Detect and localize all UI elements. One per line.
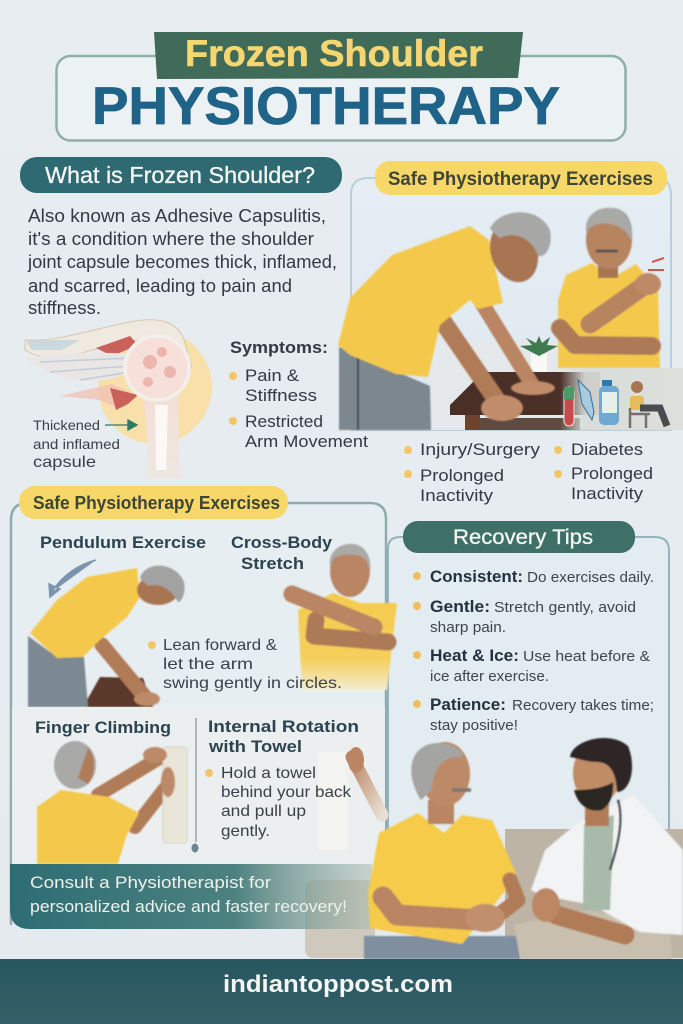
- tips list: stay positive!: [430, 717, 518, 734]
- definition text: it's a condition where the shoulder: [28, 229, 314, 249]
- definition text: joint capsule becomes thick, inflamed,: [27, 252, 337, 272]
- capsule label: and inflamed: [33, 436, 120, 452]
- pendulum instructions: let the arm: [163, 656, 253, 673]
- heading pill: what is frozen shoulder: [20, 157, 342, 193]
- tips list: Gentle:: [430, 597, 490, 616]
- symptoms list: Arm Movement: [245, 432, 368, 451]
- towel and arm: [318, 747, 382, 850]
- heading pill: recovery tips: Recovery Tips: [453, 526, 593, 549]
- internal rotation instructions: Hold a towel: [221, 765, 316, 782]
- footer: [0, 959, 683, 1024]
- callout: consult a physiotherapist: Consult a Physiotherapist for: [30, 873, 271, 892]
- arrow: capsule pointer: [105, 420, 137, 430]
- footer: indiantoppost.com: [223, 971, 453, 998]
- person: patient: [364, 742, 521, 959]
- panel: what is frozen shoulder: [20, 157, 342, 318]
- person: cross-body man: [558, 208, 661, 368]
- capsule label: capsule: [33, 454, 96, 471]
- heading pill: safe physiotherapy exercises lower: [19, 486, 288, 519]
- risk factors list: Inactivity: [571, 484, 644, 503]
- symptoms list: Stiffness: [245, 386, 317, 405]
- risk factors list: Inactivity: [420, 486, 494, 505]
- divider line: [192, 718, 198, 852]
- icon: test tube: [564, 387, 574, 426]
- person: doctor: [514, 738, 683, 959]
- definition text: Also known as Adhesive Capsulitis,: [28, 206, 326, 226]
- person: bending man: [338, 212, 555, 430]
- person: cross-body stretch: [292, 544, 397, 690]
- exercise heading: pendulum: Pendulum Exercise: [40, 533, 206, 552]
- panel: recovery tips: [388, 521, 669, 835]
- panel: safe physiotherapy exercises lower: [11, 486, 397, 925]
- person: finger climbing: [37, 741, 187, 864]
- tips list: Patience:: [430, 695, 506, 714]
- panel: exercises photo: [338, 161, 683, 430]
- definition text: and scarred, leading to pain and: [28, 276, 292, 296]
- heading pill: recovery tips: [403, 521, 635, 553]
- icon: seated person: [630, 381, 667, 428]
- tips list: [413, 567, 654, 734]
- icon: bottle: [599, 380, 619, 425]
- person: pendulum exercise: [28, 566, 185, 707]
- title banner: [154, 32, 523, 79]
- plant: [520, 336, 558, 372]
- internal rotation instructions: gently.: [221, 823, 270, 840]
- tips list: Heat & Ice:: [430, 646, 519, 665]
- exercise heading: cross-body stretch: [231, 533, 333, 573]
- risk factors list: [404, 440, 653, 505]
- table: [450, 372, 600, 430]
- arrow: pendulum swing: [49, 560, 96, 597]
- shoulder anatomy illustration: [25, 320, 212, 478]
- heading pill: safe physiotherapy exercises top: [375, 161, 667, 195]
- exercise heading: internal rotation: Internal Rotation: [208, 717, 359, 736]
- internal rotation instructions: and pull up: [221, 803, 306, 820]
- tips list: Stretch gently, avoid: [494, 599, 636, 616]
- causes icons strip: [560, 368, 683, 430]
- definition text: [27, 206, 337, 318]
- callout: consult a physiotherapist: personalized advice and faster recovery!: [30, 897, 347, 916]
- pendulum instructions: Lean forward &: [163, 637, 277, 654]
- lower exercises backdrop: [12, 707, 385, 864]
- tips list: sharp pain.: [430, 619, 506, 636]
- pendulum instructions: [148, 637, 342, 692]
- exercise heading: cross-body stretch: Stretch: [241, 554, 304, 573]
- heading pill: safe physiotherapy exercises top: Safe Physiotherapy Exercises: [388, 169, 653, 190]
- icons: pain arrows: [648, 258, 664, 270]
- symptoms list: Restricted: [245, 412, 323, 431]
- risk factors list: Injury/Surgery: [420, 440, 541, 459]
- capsule label: Thickened: [33, 417, 100, 433]
- couch: [305, 829, 683, 958]
- tips list: ice after exercise.: [430, 668, 549, 685]
- capsule label: [33, 417, 120, 471]
- icon: IV bag: [578, 380, 594, 420]
- title line: Frozen Shoulder: Frozen Shoulder: [185, 33, 483, 74]
- tips list: Do exercises daily.: [527, 569, 654, 586]
- exercise heading: internal rotation: [208, 717, 359, 756]
- tips list: Use heat before &: [523, 648, 650, 665]
- symptoms list: Symptoms:: [230, 338, 328, 357]
- callout: consult a physiotherapist: [10, 864, 372, 929]
- risk factors list: Prolonged: [420, 466, 504, 485]
- exercise heading: finger climbing: Finger Climbing: [35, 718, 171, 737]
- title line: Physiotherapy: PHYSIOTHERAPY: [92, 77, 560, 136]
- internal rotation instructions: [205, 765, 352, 840]
- definition text: stiffness.: [28, 298, 101, 318]
- tips list: Recovery takes time;: [512, 697, 654, 714]
- heading pill: what is frozen shoulder: What is Frozen Shoulder?: [45, 162, 315, 188]
- internal rotation instructions: behind your back: [221, 784, 352, 801]
- pendulum instructions: swing gently in circles.: [163, 675, 342, 692]
- risk factors list: Prolonged: [571, 464, 653, 483]
- heading pill: safe physiotherapy exercises lower: Safe Physiotherapy Exercises: [33, 493, 280, 513]
- exercise heading: cross-body stretch: Cross-Body: [231, 533, 333, 552]
- tips list: Consistent:: [430, 567, 523, 586]
- wall backdrop: [430, 340, 560, 430]
- risk factors list: Diabetes: [571, 440, 643, 459]
- title block: [56, 32, 626, 140]
- exercise heading: internal rotation: with Towel: [208, 737, 302, 756]
- symptoms list: [229, 338, 368, 451]
- symptoms list: Pain &: [245, 366, 300, 385]
